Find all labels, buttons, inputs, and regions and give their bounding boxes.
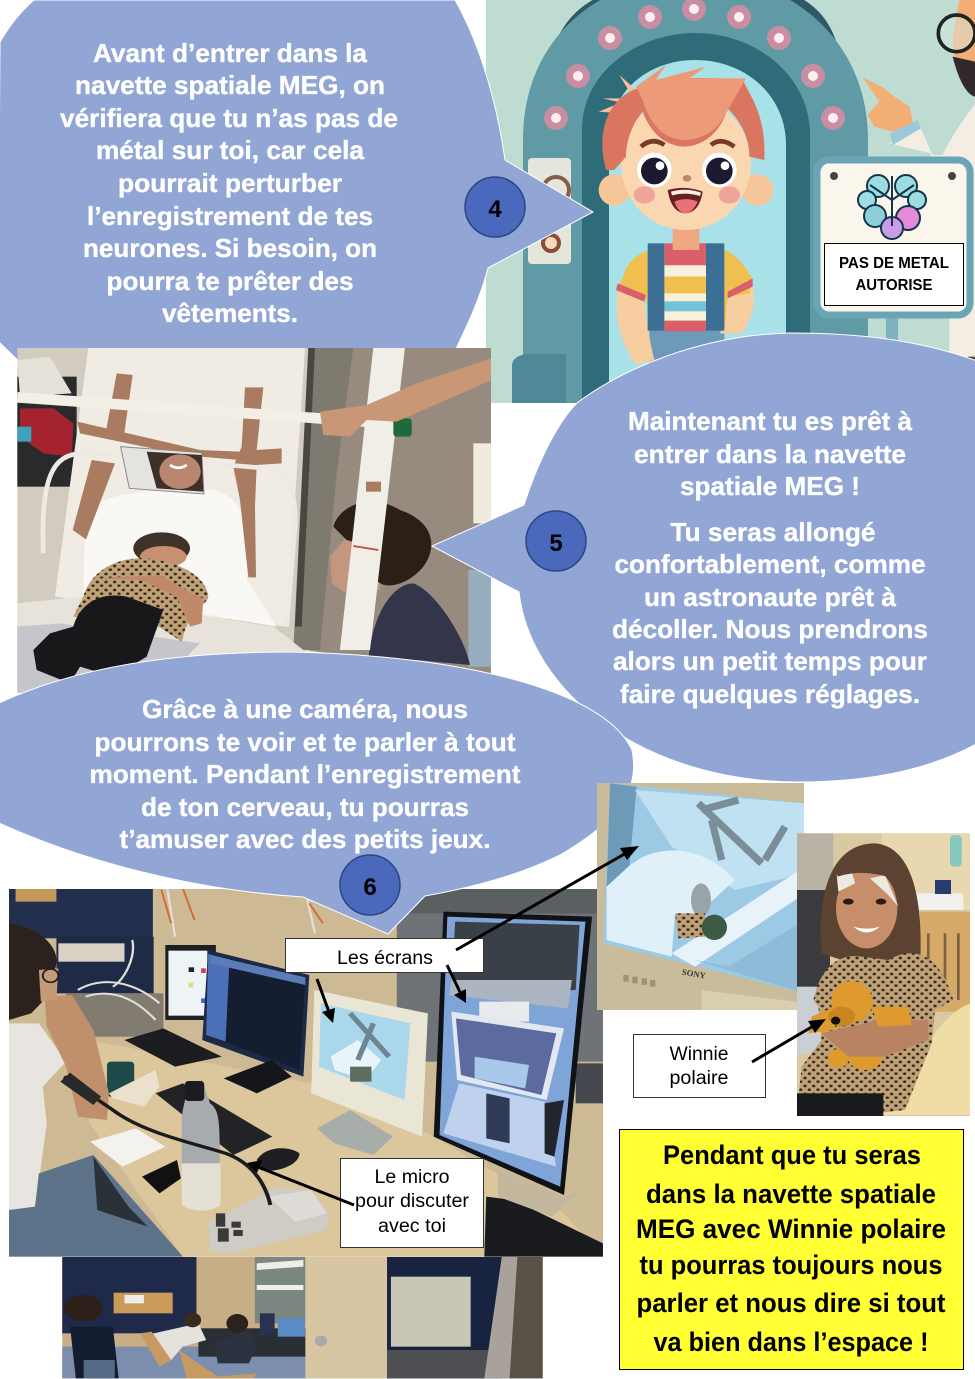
- arrow: Winnie bear: [752, 1019, 826, 1062]
- sign label: AUTORISE: [856, 277, 932, 294]
- text: entering the shuttle: spatiale MEG !: [680, 471, 860, 501]
- text: camera and games: pourrons te voir et te parler à tout: [94, 727, 516, 757]
- label: screens: [286, 938, 484, 972]
- person at desk: [9, 923, 183, 1257]
- text: metal check: métal sur toi, car cela: [96, 135, 365, 165]
- people: [64, 1295, 257, 1378]
- text: entering the shuttle: entrer dans la navette: [634, 439, 906, 469]
- illustration: child in metal detector arch: [486, 0, 975, 403]
- step number 6: [340, 855, 400, 915]
- mirror: [121, 447, 204, 494]
- text: metal check: l’enregistrement de tes: [87, 201, 373, 231]
- text: entering the shuttle: décoller. Nous prendrons: [612, 614, 928, 644]
- label: Winnie bear: Winnie: [670, 1044, 728, 1065]
- photo: monitor showing the child: SONY: [681, 967, 707, 981]
- speech bubble 5: [432, 333, 975, 782]
- callout: yellow message: [620, 1130, 964, 1370]
- tape strips: [73, 373, 282, 577]
- text: metal check: pourrait perturber: [118, 168, 342, 198]
- photo: child with bear: [797, 833, 970, 1117]
- text: metal check: neurones. Si besoin, on: [83, 233, 377, 263]
- text: camera and games: moment. Pendant l’enregistrement: [90, 759, 521, 789]
- label: microphone: pour discuter: [355, 1191, 470, 1212]
- arrow: screens to large monitor: [447, 965, 466, 1003]
- text: metal check: pourra te prêter des: [106, 266, 354, 296]
- text: entering the shuttle: confortablement, comme: [614, 549, 926, 579]
- sign label: PAS DE METAL: [839, 255, 949, 272]
- text: metal check: vérifiera que tu n’as pas de: [60, 103, 398, 133]
- text: entering the shuttle: un astronaute prêt à: [644, 582, 897, 612]
- label: microphone: Le micro: [374, 1167, 450, 1188]
- left monitors: [165, 945, 309, 1093]
- photo: monitor showing the child: [595, 780, 808, 1013]
- label: screens: Les écrans: [337, 948, 433, 969]
- photo: child lying in the MEG: [17, 347, 492, 694]
- large portrait monitor: [434, 912, 592, 1195]
- text: entering the shuttle: Maintenant tu es prêt à: [628, 406, 913, 436]
- text: camera and games: de ton cerveau, tu pourras: [141, 792, 469, 822]
- label: microphone: avec toi: [378, 1216, 446, 1237]
- cables and equipment: [66, 888, 323, 1037]
- callout: yellow message: Pendant que tu seras: [663, 1140, 921, 1170]
- callout: yellow message: va bien dans l’espace !: [654, 1327, 928, 1357]
- doctor pointing: [863, 0, 975, 400]
- text: entering the shuttle: Tu seras allongé: [670, 517, 876, 547]
- step number 6: 6: [363, 874, 377, 901]
- lights on the arch: [544, 0, 845, 130]
- text: entering the shuttle: alors un petit temps pour: [613, 646, 927, 676]
- Sony monitor on desk: [311, 990, 428, 1155]
- speech bubble 6: [0, 652, 634, 934]
- text: entering the shuttle: faire quelques réglages.: [620, 679, 920, 709]
- arrow: screens to Sony monitor: [456, 846, 639, 950]
- child: [33, 532, 208, 683]
- desk microphone: [60, 1073, 329, 1253]
- text: camera and games: Grâce à une caméra, nous: [142, 694, 468, 724]
- step number 4: 4: [488, 196, 502, 223]
- step number 4: [465, 177, 525, 237]
- label: microphone: [340, 1158, 484, 1248]
- callout: yellow message: tu pourras toujours nous: [640, 1250, 942, 1280]
- text: metal check: [60, 38, 398, 328]
- label: Winnie bear: [634, 1034, 766, 1098]
- sign label: [824, 244, 964, 306]
- papers and phone: [90, 1128, 165, 1167]
- callout: yellow message: MEG avec Winnie polaire: [636, 1214, 946, 1244]
- bed: [18, 597, 491, 674]
- step number 5: [526, 511, 586, 571]
- text: metal check: Avant d’entrer dans la: [93, 38, 368, 68]
- hands and arm: [320, 358, 492, 437]
- text: entering the shuttle: [612, 406, 928, 709]
- text: metal check: vêtements.: [162, 298, 298, 328]
- desk surface: [89, 1040, 603, 1257]
- photo: room with the team: [62, 1257, 543, 1378]
- child: [797, 843, 953, 1117]
- bear: [808, 981, 928, 1070]
- icon: brain logo: [858, 175, 926, 239]
- callout: yellow message: parler et nous dire si tout: [636, 1288, 946, 1318]
- text: camera and games: t’amuser avec des petits jeux.: [120, 824, 490, 854]
- step number 5: 5: [549, 530, 563, 557]
- callout: yellow message: dans la navette spatiale: [646, 1179, 936, 1209]
- text: metal check: navette spatiale MEG, on: [75, 70, 385, 100]
- sign: [814, 156, 974, 340]
- arrow: screens to small monitor: [317, 979, 335, 1023]
- text: camera and games: [90, 694, 521, 854]
- boy: [598, 65, 774, 365]
- man: [330, 502, 470, 665]
- arrow: microphone: [247, 1160, 354, 1205]
- water bottle: [182, 1080, 221, 1211]
- speech bubble 4: [0, 0, 593, 372]
- label: Winnie bear: polaire: [670, 1068, 728, 1089]
- photo: control room desk: [9, 888, 603, 1257]
